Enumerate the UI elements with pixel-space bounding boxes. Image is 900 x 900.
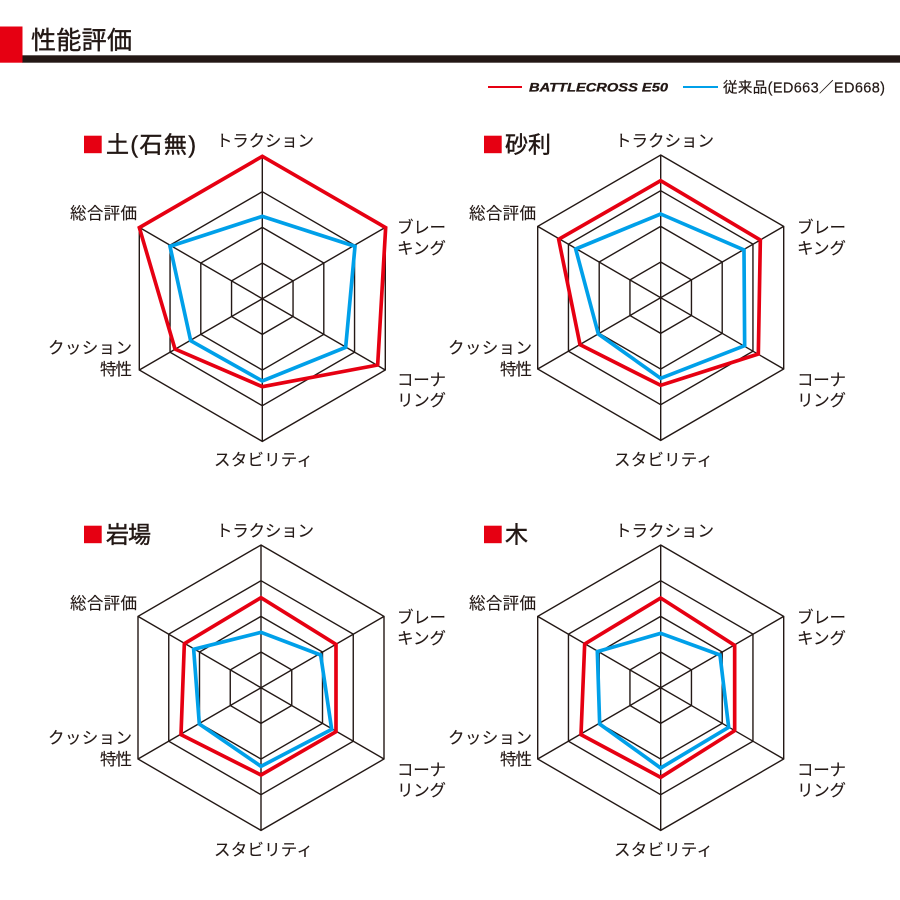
panel: 砂利 bbox=[448, 132, 846, 470]
axis labels: 特性 bbox=[500, 360, 532, 379]
axis labels bbox=[48, 522, 446, 860]
axis labels: キング bbox=[797, 629, 846, 648]
legend: BATTLECROSS E50: BATTLECROSS E50 bbox=[529, 80, 668, 94]
axis labels: トラクション bbox=[216, 522, 314, 540]
axis labels: リング bbox=[797, 781, 846, 800]
axis labels: 特性 bbox=[100, 360, 132, 379]
axis labels: スタビリティ bbox=[614, 450, 713, 470]
axis labels: トラクション bbox=[615, 522, 714, 540]
axis labels bbox=[448, 522, 846, 860]
axis labels: コーナ bbox=[397, 762, 446, 780]
heading bbox=[484, 132, 551, 158]
axis labels: 特性 bbox=[500, 750, 532, 769]
axis labels: コーナ bbox=[797, 762, 846, 780]
axis labels: リング bbox=[797, 391, 846, 410]
axis labels: トラクション bbox=[216, 132, 314, 150]
axis labels: ブレー bbox=[397, 217, 446, 237]
axis labels: 総合評価 bbox=[469, 204, 536, 223]
legend bbox=[488, 80, 885, 96]
axis labels bbox=[48, 132, 446, 470]
radar chart bbox=[139, 156, 386, 441]
axis labels: クッション bbox=[448, 338, 532, 358]
heading: 木 bbox=[505, 522, 528, 548]
axis labels: 特性 bbox=[100, 750, 132, 769]
heading bbox=[484, 522, 528, 548]
title: 性能評価 bbox=[31, 27, 132, 55]
axis labels: ブレー bbox=[797, 607, 846, 627]
axis labels: コーナ bbox=[797, 372, 846, 390]
heading bbox=[84, 522, 151, 548]
axis labels: スタビリティ bbox=[614, 840, 713, 860]
axis labels bbox=[448, 132, 846, 470]
axis labels: リング bbox=[397, 781, 446, 800]
legend: previous product: 従来品(ED663／ED668) bbox=[723, 80, 885, 96]
heading: 土(石無) bbox=[106, 132, 196, 158]
axis labels: スタビリティ bbox=[214, 840, 313, 860]
axis labels: スタビリティ bbox=[214, 450, 313, 470]
axis labels: クッション bbox=[448, 728, 532, 748]
axis labels: キング bbox=[397, 239, 446, 258]
axis labels: ブレー bbox=[797, 217, 846, 237]
panel: 木 bbox=[448, 522, 846, 860]
axis labels: クッション bbox=[48, 338, 132, 358]
axis labels: トラクション bbox=[615, 132, 714, 150]
axis labels: 総合評価 bbox=[70, 204, 137, 223]
radar chart bbox=[538, 545, 784, 830]
axis labels: 総合評価 bbox=[469, 594, 536, 613]
axis labels: 総合評価 bbox=[70, 594, 137, 613]
panel: 土(石無) bbox=[48, 132, 446, 470]
axis labels: リング bbox=[397, 391, 446, 410]
panel: 岩場 bbox=[48, 522, 446, 860]
axis labels: キング bbox=[797, 239, 846, 258]
axis labels: クッション bbox=[48, 728, 132, 748]
radar chart bbox=[138, 545, 384, 830]
header band bbox=[0, 26, 900, 63]
radar chart bbox=[538, 155, 784, 440]
axis labels: コーナ bbox=[397, 372, 446, 390]
axis labels: ブレー bbox=[397, 607, 446, 627]
heading: 砂利 bbox=[505, 132, 551, 158]
heading: 岩場 bbox=[106, 522, 151, 548]
axis labels: キング bbox=[397, 629, 446, 648]
